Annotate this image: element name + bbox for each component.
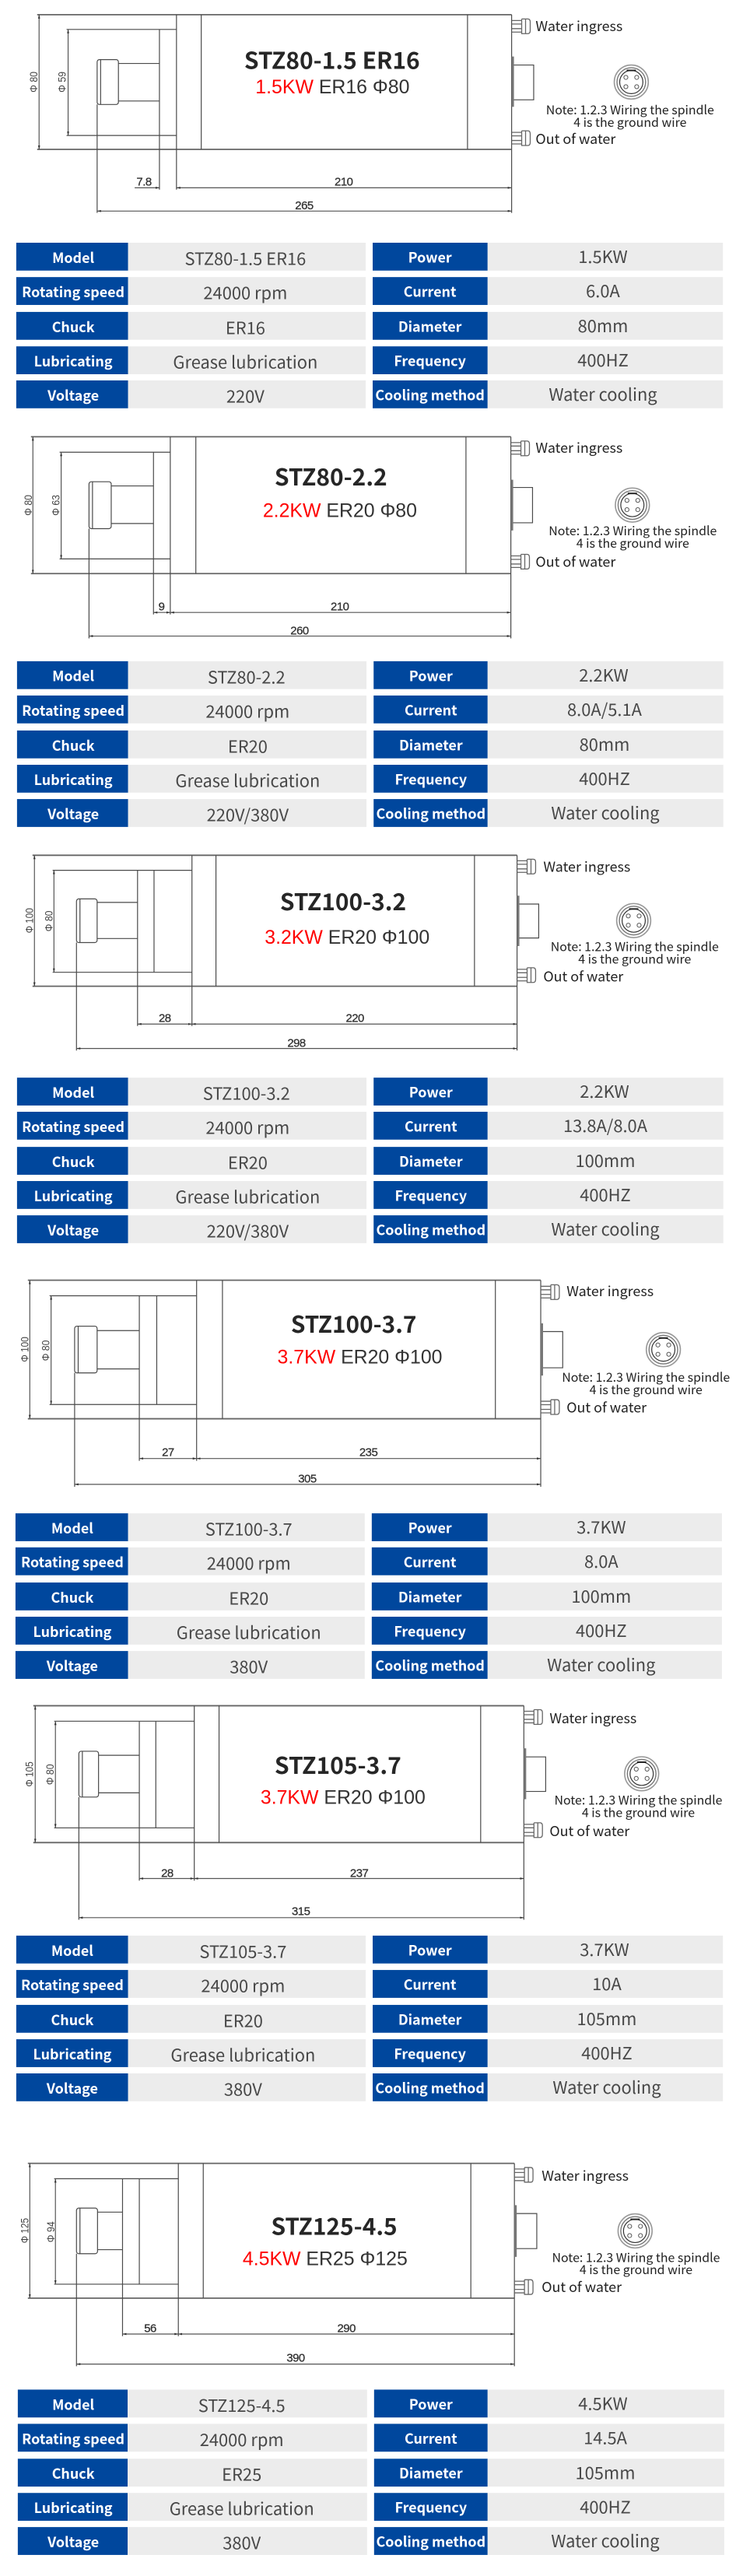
dimension labels: 305	[298, 1472, 317, 1485]
dimension labels	[23, 908, 364, 1050]
row: model and power: Power	[409, 1082, 453, 1102]
row: rotating speed and current: 6.0A	[586, 279, 621, 303]
spindle dimension drawing	[33, 855, 538, 1050]
wiring note: 4 is the ground wire	[573, 113, 687, 131]
title: STZ100-3.7	[291, 1306, 416, 1340]
panel: STZ125-4.5	[18, 2164, 724, 2555]
row: voltage and cooling method: Water cooling	[551, 801, 660, 825]
row: voltage and cooling method: Cooling method	[377, 804, 485, 824]
row: model and power: Power	[408, 1940, 452, 1960]
row: lubricating and frequency	[17, 765, 724, 793]
dimension labels: 9	[159, 601, 165, 614]
row: lubricating and frequency: Frequency	[394, 351, 467, 371]
row: model and power: 2.2KW	[580, 1079, 629, 1103]
row: rotating speed and current	[16, 1547, 722, 1575]
icon: wiring connector	[618, 2214, 652, 2248]
row: rotating speed and current: 24000 rpm	[201, 1974, 285, 1998]
out of water label: Out of water	[535, 551, 615, 571]
dimension labels: 56	[144, 2322, 156, 2335]
dimension labels: 220	[345, 1011, 364, 1025]
row: model and power: STZ80-2.2	[208, 664, 286, 689]
row: rotating speed and current: Current	[405, 2428, 457, 2448]
row: rotating speed and current: 14.5A	[584, 2425, 628, 2449]
row: voltage and cooling method: Voltage	[47, 1220, 99, 1240]
row: rotating speed and current: Rotating speed	[21, 1552, 124, 1572]
wiring note: Note: 1.2.3 Wiring the spindle	[546, 100, 714, 118]
out of water label: Out of water	[535, 128, 615, 149]
row: voltage and cooling method: Water cooling	[548, 382, 657, 406]
water ingress label: Water ingress	[535, 437, 622, 457]
row: model and power: 3.7KW	[577, 1515, 626, 1539]
row: voltage and cooling method: Cooling method	[375, 384, 485, 405]
row: model and power: Model	[52, 666, 94, 686]
row: model and power: Power	[409, 2394, 453, 2414]
row: rotating speed and current: Rotating speed	[22, 282, 124, 302]
row: model and power	[16, 1513, 722, 1541]
row: lubricating and frequency: Frequency	[394, 1621, 467, 1641]
dimension labels: Φ 105	[23, 1761, 35, 1787]
row: lubricating and frequency: 400HZ	[581, 2041, 633, 2065]
wiring note	[546, 100, 714, 131]
dimension labels: 260	[290, 624, 309, 637]
dimension labels: Φ 63	[50, 495, 62, 516]
icon: wiring connector	[617, 903, 650, 938]
row: voltage and cooling method: 220V	[226, 384, 265, 408]
row: lubricating and frequency: 400HZ	[579, 766, 630, 790]
row: lubricating and frequency: Lubricating	[34, 351, 113, 371]
wiring note	[554, 1790, 723, 1821]
dimension labels: 290	[338, 2322, 356, 2335]
row: voltage and cooling method: 380V	[223, 2531, 261, 2555]
row: chuck and diameter: Diameter	[399, 2463, 463, 2483]
row: lubricating and frequency	[16, 2039, 723, 2067]
row: rotating speed and current: Rotating speed	[22, 2428, 124, 2448]
row: rotating speed and current: Current	[405, 1116, 457, 1136]
row: lubricating and frequency: 400HZ	[580, 1183, 631, 1207]
title: STZ105-3.7	[275, 1747, 401, 1781]
dimension labels: Φ 80	[44, 1764, 56, 1785]
wiring note: Note: 1.2.3 Wiring the spindle	[562, 1368, 730, 1386]
row: voltage and cooling method: Water cooling	[551, 1217, 660, 1241]
row: model and power: Model	[52, 1082, 94, 1102]
row: lubricating and frequency: Lubricating	[34, 1186, 113, 1206]
row: chuck and diameter	[18, 2459, 724, 2487]
row: voltage and cooling method	[17, 799, 724, 827]
row: lubricating and frequency	[16, 1617, 722, 1645]
row: voltage and cooling method	[16, 1651, 722, 1679]
row: lubricating and frequency: 400HZ	[577, 348, 629, 372]
row: chuck and diameter: Chuck	[52, 735, 95, 755]
row: lubricating and frequency: Grease lubrication	[175, 1184, 320, 1208]
out of water label: Out of water	[566, 1397, 647, 1417]
row: model and power: STZ105-3.7	[199, 1939, 286, 1963]
row: rotating speed and current: Current	[404, 1975, 457, 1995]
row: rotating speed and current: Rotating speed	[21, 1975, 124, 1995]
row: model and power: 3.7KW	[580, 1937, 629, 1961]
dimension labels	[18, 1337, 377, 1485]
row: rotating speed and current	[16, 277, 723, 305]
row: lubricating and frequency: Frequency	[394, 2044, 467, 2064]
dimension labels	[22, 495, 349, 637]
row: voltage and cooling method	[16, 380, 723, 408]
row: chuck and diameter	[16, 312, 723, 340]
water ingress label: Water ingress	[566, 1281, 654, 1301]
dimension labels: 28	[161, 1866, 173, 1880]
spec table	[16, 1936, 723, 2101]
spec table	[16, 243, 723, 408]
row: chuck and diameter: 80mm	[578, 314, 628, 338]
icon: water outlet fitting	[524, 1823, 542, 1838]
row: voltage and cooling method: 380V	[230, 1655, 268, 1679]
row: lubricating and frequency: Frequency	[395, 2497, 468, 2518]
row: rotating speed and current: 24000 rpm	[207, 1551, 291, 1575]
row: rotating speed and current: Rotating speed	[22, 700, 124, 720]
row: lubricating and frequency	[17, 1181, 724, 1209]
row: voltage and cooling method: Water cooling	[551, 2529, 660, 2553]
row: model and power	[17, 1078, 724, 1106]
icon: water ingress fitting	[541, 1284, 559, 1299]
water ingress label: Water ingress	[543, 857, 630, 877]
row: rotating speed and current: 24000 rpm	[205, 1115, 289, 1139]
spindle dimension drawing	[33, 1705, 545, 1920]
row: model and power: STZ100-3.2	[203, 1081, 290, 1106]
row: rotating speed and current	[17, 696, 724, 724]
spec table	[18, 2389, 724, 2555]
row: voltage and cooling method: Cooling method	[375, 2077, 485, 2098]
wiring note: 4 is the ground wire	[580, 2260, 692, 2278]
row: rotating speed and current: 10A	[592, 1971, 622, 1996]
wiring note: Note: 1.2.3 Wiring the spindle	[552, 2248, 720, 2266]
panel: STZ100-3.7	[16, 1280, 730, 1679]
row: rotating speed and current: Current	[404, 282, 457, 302]
row: voltage and cooling method: Water cooling	[547, 1652, 656, 1677]
row: chuck and diameter: ER20	[228, 1151, 268, 1175]
title: STZ125-4.5	[272, 2207, 398, 2241]
wiring note: Note: 1.2.3 Wiring the spindle	[551, 938, 719, 955]
row: chuck and diameter: ER20	[223, 2008, 263, 2032]
dimension labels: 237	[350, 1866, 369, 1880]
row: lubricating and frequency: Frequency	[395, 1185, 468, 1205]
spindle dimension drawing	[28, 1280, 563, 1487]
out of water label: Out of water	[543, 966, 623, 986]
title: STZ80-2.2	[275, 458, 387, 492]
row: lubricating and frequency: Grease lubrication	[173, 350, 317, 374]
icon: wiring connector	[615, 488, 650, 522]
row: chuck and diameter: Chuck	[52, 317, 95, 337]
row: chuck and diameter	[17, 731, 724, 759]
row: voltage and cooling method: Cooling method	[375, 1656, 485, 1676]
dimension labels: Φ 100	[18, 1337, 30, 1362]
row: lubricating and frequency: Lubricating	[33, 2044, 112, 2064]
row: voltage and cooling method: 220V/380V	[207, 803, 289, 827]
row: chuck and diameter: Diameter	[399, 734, 463, 755]
dimension labels	[23, 1761, 369, 1919]
dimension labels: 265	[295, 199, 314, 212]
row: voltage and cooling method: Voltage	[46, 1656, 98, 1676]
row: chuck and diameter	[17, 1147, 724, 1175]
row: chuck and diameter: Chuck	[52, 2463, 95, 2483]
row: lubricating and frequency: 400HZ	[576, 1618, 627, 1642]
row: model and power: Model	[52, 247, 94, 268]
row: rotating speed and current: 8.0A	[584, 1549, 619, 1573]
wiring note	[548, 521, 717, 552]
panel: STZ105-3.7	[16, 1705, 723, 2101]
dimension labels: Φ 125	[18, 2218, 30, 2243]
subtitle: 3.7KW ER20 Φ100	[278, 1346, 442, 1368]
wiring note: 4 is the ground wire	[577, 534, 689, 552]
row: rotating speed and current: 24000 rpm	[200, 2427, 284, 2452]
row: lubricating and frequency: Lubricating	[33, 1621, 112, 1642]
row: rotating speed and current: 8.0A/5.1A	[567, 697, 643, 721]
panel: STZ80-1.5 ER16	[16, 15, 723, 408]
row: chuck and diameter: Chuck	[52, 1151, 95, 1172]
row: lubricating and frequency	[16, 346, 723, 374]
wiring note: Note: 1.2.3 Wiring the spindle	[554, 1790, 723, 1808]
dimension labels: 7.8	[136, 176, 152, 189]
panel: STZ80-2.2	[17, 436, 724, 827]
icon: water ingress fitting	[514, 2168, 533, 2182]
row: model and power: Model	[51, 1940, 93, 1961]
dimension labels: Φ 80	[22, 495, 34, 516]
icon: water ingress fitting	[511, 441, 529, 456]
wiring note	[551, 938, 719, 967]
dimension labels	[27, 72, 353, 212]
icon: water ingress fitting	[512, 19, 530, 33]
row: rotating speed and current: 24000 rpm	[203, 281, 287, 305]
row: model and power: Power	[408, 1518, 452, 1538]
row: rotating speed and current: Current	[405, 699, 457, 720]
spec table	[17, 1078, 724, 1243]
water ingress label: Water ingress	[535, 16, 622, 36]
subtitle: 3.7KW ER20 Φ100	[261, 1786, 426, 1808]
spindle dimension drawing	[28, 2164, 537, 2366]
row: model and power: STZ125-4.5	[198, 2393, 286, 2417]
row: voltage and cooling method: Voltage	[47, 2532, 99, 2552]
row: rotating speed and current: Current	[404, 1551, 457, 1572]
icon: wiring connector	[625, 1757, 659, 1791]
row: chuck and diameter: Chuck	[51, 1587, 94, 1607]
subtitle: 4.5KW ER25 Φ125	[243, 2248, 408, 2269]
dimension labels: 298	[287, 1036, 306, 1050]
row: chuck and diameter: ER20	[229, 1586, 268, 1610]
row: voltage and cooling method: Voltage	[47, 385, 99, 405]
dimension labels: 27	[162, 1446, 174, 1460]
row: chuck and diameter: Chuck	[51, 2010, 94, 2030]
row: rotating speed and current	[18, 2424, 724, 2452]
row: voltage and cooling method: Voltage	[46, 2078, 98, 2098]
subtitle: 2.2KW ER20 Φ80	[263, 500, 417, 522]
row: voltage and cooling method: Cooling method	[377, 1220, 485, 1240]
spindle dimension drawing	[37, 15, 534, 213]
water ingress label: Water ingress	[541, 2165, 629, 2185]
panel: STZ100-3.2	[17, 855, 724, 1243]
spindle dimension drawing	[31, 436, 532, 639]
dimension labels: Φ 94	[44, 2221, 57, 2242]
row: chuck and diameter: Diameter	[398, 1587, 462, 1607]
water ingress label: Water ingress	[549, 1708, 636, 1728]
row: chuck and diameter: ER16	[226, 315, 265, 339]
dimension labels: 235	[359, 1446, 377, 1460]
spec table	[16, 1513, 722, 1679]
dimension labels: 28	[159, 1011, 171, 1025]
row: lubricating and frequency: Grease lubrication	[177, 1620, 321, 1644]
row: model and power: Power	[409, 665, 453, 685]
spec table	[17, 661, 724, 827]
row: lubricating and frequency: Frequency	[395, 769, 468, 789]
icon: water ingress fitting	[517, 859, 535, 874]
title: STZ100-3.2	[280, 883, 406, 917]
row: voltage and cooling method: Voltage	[47, 804, 99, 824]
icon: water ingress fitting	[524, 1710, 542, 1724]
dimension labels: Φ 80	[39, 1340, 51, 1361]
dimension labels: Φ 80	[27, 72, 40, 93]
row: voltage and cooling method: Water cooling	[552, 2075, 661, 2099]
row: lubricating and frequency: Grease lubrication	[175, 768, 320, 792]
out of water label: Out of water	[541, 2276, 622, 2297]
row: voltage and cooling method: 220V/380V	[207, 1219, 289, 1243]
row: rotating speed and current: Rotating speed	[22, 1116, 124, 1137]
wiring note	[562, 1368, 730, 1398]
icon: water outlet fitting	[514, 2280, 533, 2294]
dimension labels: 390	[286, 2352, 305, 2365]
subtitle: 3.2KW ER20 Φ100	[265, 927, 429, 948]
row: voltage and cooling method	[18, 2527, 724, 2555]
row: chuck and diameter: Diameter	[398, 2009, 462, 2029]
row: model and power	[16, 243, 723, 271]
row: model and power	[16, 1936, 723, 1964]
row: model and power: 2.2KW	[579, 663, 629, 687]
dimension labels: Φ 59	[56, 72, 68, 93]
icon: water outlet fitting	[541, 1400, 559, 1414]
wiring note	[552, 2248, 720, 2278]
dimension labels: 210	[331, 601, 349, 614]
row: chuck and diameter: 105mm	[577, 2006, 636, 2031]
row: voltage and cooling method: Cooling method	[377, 2532, 485, 2552]
row: rotating speed and current: 13.8A/8.0A	[563, 1113, 648, 1137]
row: voltage and cooling method	[17, 1215, 724, 1243]
row: lubricating and frequency: Lubricating	[34, 769, 113, 790]
title: STZ80-1.5 ER16	[244, 42, 420, 76]
row: chuck and diameter: ER25	[222, 2462, 261, 2487]
icon: water outlet fitting	[511, 555, 529, 569]
dimension labels	[18, 2218, 356, 2365]
dimension labels: Φ 80	[43, 910, 55, 931]
row: model and power	[17, 661, 724, 689]
subtitle: 1.5KW ER16 Φ80	[255, 76, 409, 98]
row: chuck and diameter: Diameter	[398, 316, 462, 336]
icon: wiring connector	[647, 1333, 680, 1367]
icon: wiring connector	[615, 65, 648, 99]
row: chuck and diameter: ER20	[228, 734, 268, 758]
row: rotating speed and current	[16, 1970, 723, 1998]
row: voltage and cooling method: 380V	[224, 2077, 262, 2101]
out of water label: Out of water	[549, 1821, 629, 1841]
row: model and power: Power	[408, 247, 452, 267]
row: chuck and diameter: 100mm	[576, 1148, 635, 1172]
wiring note: 4 is the ground wire	[578, 949, 692, 967]
row: lubricating and frequency: 400HZ	[580, 2494, 631, 2518]
wiring note: 4 is the ground wire	[590, 1380, 703, 1398]
row: model and power: 4.5KW	[578, 2391, 628, 2415]
row: rotating speed and current: 24000 rpm	[205, 699, 289, 723]
row: model and power: STZ100-3.7	[205, 1517, 293, 1541]
row: model and power: 1.5KW	[578, 244, 628, 268]
row: chuck and diameter: 80mm	[580, 732, 629, 756]
icon: water outlet fitting	[517, 968, 535, 983]
wiring note: 4 is the ground wire	[582, 1803, 695, 1821]
row: chuck and diameter	[16, 1582, 722, 1610]
row: rotating speed and current	[17, 1112, 724, 1140]
row: model and power: Model	[51, 1518, 93, 1538]
row: model and power	[18, 2389, 724, 2417]
wiring note: Note: 1.2.3 Wiring the spindle	[548, 521, 717, 539]
row: chuck and diameter	[16, 2005, 723, 2033]
row: voltage and cooling method	[16, 2073, 723, 2101]
dimension labels: 210	[335, 176, 353, 189]
row: lubricating and frequency: Grease lubrication	[170, 2043, 315, 2067]
row: chuck and diameter: 105mm	[576, 2460, 635, 2484]
row: lubricating and frequency	[18, 2493, 724, 2521]
dimension labels: Φ 100	[23, 908, 35, 933]
row: lubricating and frequency: Grease lubrication	[170, 2497, 314, 2521]
icon: water outlet fitting	[512, 131, 530, 145]
row: model and power: Model	[52, 2394, 94, 2414]
dimension labels: 315	[292, 1905, 310, 1919]
row: chuck and diameter: Diameter	[399, 1151, 463, 1172]
row: model and power: STZ80-1.5 ER16	[185, 246, 306, 270]
row: chuck and diameter: 100mm	[571, 1584, 631, 1608]
row: lubricating and frequency: Lubricating	[34, 2497, 113, 2518]
